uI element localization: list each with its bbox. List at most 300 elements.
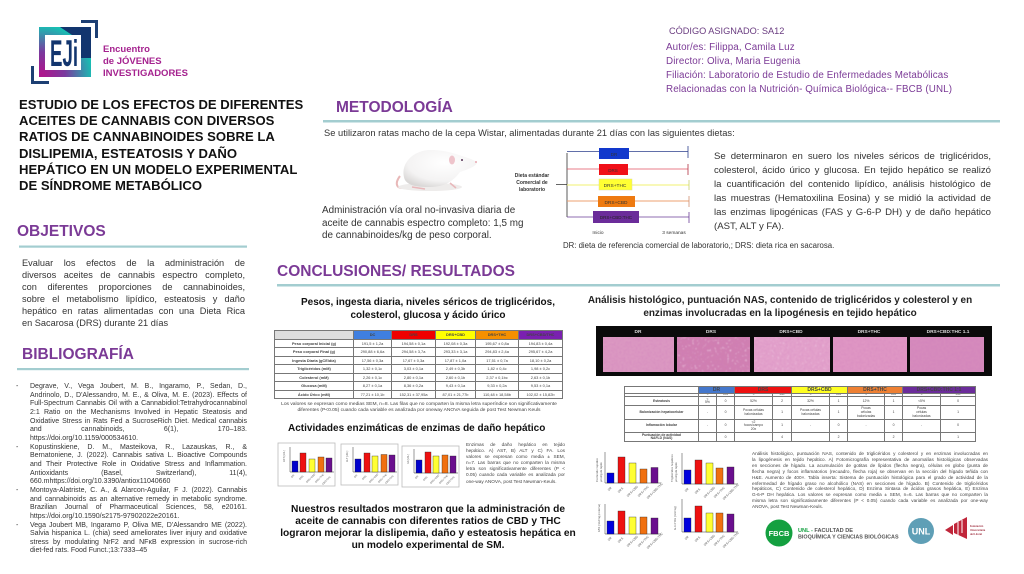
- table: body weight and serum: 110,48 ± 18,58b: [483, 392, 511, 397]
- chart: E G-6-P DH: [673, 499, 740, 549]
- heading: análisis histológico: [588, 295, 972, 319]
- bibliography list: stress by modulating NrF2 and NFκB expression in sucrose-rich: [30, 539, 247, 546]
- chart: ALT: DR: [354, 474, 358, 479]
- bibliography list: and cannabinoids as an alternative remedy in metabolic syndrome.: [30, 496, 247, 503]
- table: NAS score: Balonización hepatocelular: [640, 410, 683, 414]
- chart: E G-6-P DH: DRS+CBD: [703, 533, 716, 547]
- table: body weight and serum: Colesterol (mM): [299, 375, 329, 380]
- table: NAS score: NAFLD (NAS): [651, 436, 672, 440]
- chart: D FAS: [597, 504, 664, 550]
- table: body weight and serum: 2,26 ± 0,1c: [363, 375, 382, 380]
- table: NAS score: DRS+CBD:THC 1:1: [917, 387, 961, 393]
- table: body weight and serum: 152,31 ± 37,95a: [399, 392, 428, 397]
- table: NAS score: 1: [838, 410, 839, 414]
- table: body weight and serum: 294,83 ± 2,4a: [485, 349, 509, 354]
- bibliography list: -: [16, 522, 18, 528]
- chart: FA: DRS+CBD: [430, 474, 440, 485]
- histology caption: enfermedad de hígado graso no alcohólico (NAS) en secciones de hígado. B) Contenido de triglicéridos: [752, 481, 988, 486]
- table: body weight and serum: 2,60 ± 0,1b: [446, 375, 465, 380]
- bibliography list: Full-Spectrum Cannabis Oil with a Cannabidiol:Tetrahydrocannabinol: [30, 400, 247, 407]
- diagram start and end labels: Inicio: [592, 230, 604, 236]
- chart: AST: DRS+THC: [315, 473, 325, 484]
- chart: B triglicéridos hepáticos: [595, 452, 664, 500]
- chart: D FAS: FAS (mU/mg proteína): [597, 504, 601, 532]
- author block: Filiación: Laboratorio de Estudio de Enfermedades Metabólicas: [666, 70, 948, 81]
- assigned code: CÓDIGO ASIGNADO: SA12: [669, 26, 784, 36]
- table: body weight and serum: 102,02 ± 15,82b: [526, 392, 555, 397]
- administration text: de cannabinoides/kg de peso corporal.: [322, 230, 492, 241]
- table: NAS score: DR: [713, 387, 720, 393]
- chart: FA: DR: [415, 475, 419, 480]
- administration text: Administración vía oral no-invasiva diaria de: [322, 205, 515, 216]
- chart: C colesterol hepático: Triglicéridos hepáticos: [670, 454, 674, 482]
- icon: white rat: [397, 150, 477, 191]
- table: NAS score: %: [810, 394, 811, 396]
- objectives text: hepático en ratas alimentadas con una Dieta Rica: [22, 306, 245, 316]
- diagram: diet groups timeline: [515, 146, 689, 236]
- logo text: Encuentro de Jóvenes Investigadores: de JÓVENES: [103, 56, 162, 67]
- bibliography list: -: [16, 444, 18, 450]
- table: body weight and serum: 192,08 ± 0,3a: [444, 341, 467, 346]
- diagram start and end labels: 3 semanas: [662, 230, 686, 236]
- table: NAS score: <2: [752, 420, 755, 424]
- chart: FA: [402, 446, 459, 487]
- section rule: metodologia: [323, 120, 1000, 122]
- objectives text: sobre el metabolismo lipídico, esteatosis y daño: [22, 294, 245, 304]
- histology panel: [596, 326, 992, 376]
- chart: AST: AST (UI/L): [283, 450, 286, 462]
- group DRS+CBD: DRS+CBD: [604, 200, 628, 206]
- table: body weight and serum: 195,67 ± 0,8a: [485, 341, 509, 346]
- histology caption: H&E. Aumento de 400×. Tabla inserta: Sistema de puntuación histológica para el grado de actividad de la: [752, 475, 988, 480]
- logo: FBCB: UNL - FACULTAD DE: [798, 528, 853, 534]
- table: body weight and serum: DRS+THC: [488, 332, 506, 337]
- table: body weight and serum: [274, 330, 563, 399]
- chart: ALT: DRS+THC: [378, 473, 388, 484]
- bibliography list: Oxidative Stress in Rats Fed a SucroseRich Diet. Medical cannabis: [30, 418, 247, 425]
- bibliography list: Salvia hispanica L. (chia) seed ameliorates liver injury and oxidative: [30, 530, 247, 537]
- group DR: [567, 146, 688, 159]
- table: NAS score: DRS+CBD: [807, 387, 832, 393]
- group DRS: [567, 164, 688, 175]
- table: NAS score: 5%: [705, 400, 710, 404]
- histology caption: [752, 451, 988, 509]
- table: NAS score: score: [836, 394, 841, 396]
- chart: FA: FA (UI/L): [407, 454, 410, 464]
- chart: B triglicéridos hepáticos: µmol/g de tejido: [599, 462, 603, 482]
- table: NAS score: -: [865, 423, 867, 427]
- author block: Director: Oliva, Maria Eugenia: [666, 56, 800, 67]
- chart: C colesterol hepático: DR: [684, 486, 690, 493]
- table: NAS score: Esteatosis: [653, 399, 670, 403]
- chart: C colesterol hepático: DRS+THC: [713, 485, 726, 499]
- table: NAS score: 0: [725, 410, 726, 414]
- heading: conclusiones y resultados: CONCLUSIONES/ RESULTADOS: [277, 263, 515, 280]
- table: NAS score: 0: [957, 423, 959, 427]
- logo text: Encuentro de Jóvenes Investigadores: INVESTIGADORES: [103, 68, 188, 79]
- chart: D FAS: DRS+CBD: [626, 534, 639, 548]
- group DR: DR: [611, 152, 618, 157]
- table: body weight and serum: DC: [370, 332, 375, 337]
- chart: C colesterol hepático: [670, 453, 740, 501]
- diagram base diet label: [515, 173, 549, 193]
- micrograph DR: [603, 337, 674, 372]
- logo: Federación Universitaria del Litoral: Federación: [970, 525, 984, 528]
- administration text: aceite de cannabis espectro completo: 1,5 mg: [322, 218, 523, 229]
- logo: FBCB: [766, 520, 899, 546]
- table: NAS score: 32%: [807, 399, 814, 403]
- bibliography list: Brazilian Journal of Pharmaceutical Sciences, 58, e20161.: [30, 504, 247, 511]
- group DRS+CBD:THC: DRS+CBD:THC: [600, 215, 633, 220]
- table: NAS score: 0: [957, 399, 959, 403]
- logo: FBCB: FBCB: [769, 529, 790, 538]
- group DRS+CBD: [567, 196, 689, 207]
- histology panel: DR: [635, 329, 642, 335]
- title: ESTUDIO DE LOS EFECTOS DE DIFERENTES: [19, 97, 303, 112]
- table: body weight and serum: 2,49 ± 0,3b: [446, 366, 465, 371]
- bibliography list: -: [16, 487, 18, 494]
- table: NAS score: Pocas células: [800, 408, 821, 412]
- logo: Federación Universitaria del Litoral: [945, 517, 986, 540]
- serum and liver measurements text: la cuantificación del contenido lipídico, análisis histológico de: [714, 179, 991, 190]
- chart: C colesterol hepático: DRS: [694, 487, 701, 495]
- table: NAS score: 12%: [863, 399, 869, 403]
- table: body weight and serum: 8,27 ± 0,1a: [363, 383, 382, 388]
- logo text: Encuentro de Jóvenes Investigadores: [103, 44, 188, 79]
- table: body weight and serum: 1,82 ± 0,4c: [487, 366, 507, 371]
- table: body weight and serum: 9,33 ± 0,2a: [487, 383, 507, 388]
- enzyme chart caption: hepático. A) AST, B) ALT y C) FA. Los: [466, 448, 565, 453]
- histology caption: misma letra son significativamente diferentes (P < 0.05) cuando cada variable es analizada por one-way: [752, 498, 988, 503]
- table: NAS score: 0: [838, 423, 839, 427]
- table: body weight and serum: 294,58 ± 3,7a: [402, 349, 425, 354]
- conclusion statement: [280, 504, 576, 551]
- enzyme chart caption: valores se expresan como media ± SEM,: [466, 454, 565, 459]
- table: body weight and serum: 9,53 ± 0,1a: [531, 383, 550, 388]
- chart: B triglicéridos hepáticos: DRS+CBD: [626, 484, 639, 498]
- micrograph DRS+THC: [833, 337, 907, 372]
- serum and liver measurements text: colesterol, ácido úrico y glucosa. En tejido hepático se realizó: [714, 165, 991, 176]
- title: HEPÁTICO EN UN MODELO EXPERIMENTAL: [19, 162, 297, 177]
- chart: C colesterol hepático: µmol/g de tejido: [674, 462, 678, 482]
- table: body weight and serum: Ingesta Diaria (gCE/día): [292, 358, 336, 363]
- table footnote: Los valores se expresan como medias SEM, n=8. Las filas que no comparten la misma letra superíndice son significativamente: [281, 402, 557, 407]
- table: body weight and serum: 9,43 ± 0,1a: [446, 383, 465, 388]
- bibliography list: diet-fed rats. Food Funct.;13:7333–45: [30, 547, 147, 554]
- histology panel: DRS+CBD: [779, 329, 803, 335]
- table: NAS score: [624, 386, 976, 442]
- table: body weight and serum: 2,80 ± 0,1a: [404, 375, 423, 380]
- chart: D FAS: DR: [607, 535, 613, 542]
- bibliography list: Andrinolo, D., D'Alessandro, M. E., & Oliva, M. E. (2023). Effects of: [30, 392, 247, 399]
- table footnote: diferentes (P<0.05) cuando cada variable es analizada por oneway ANOVA seguida de post Test Newman Keuls: [297, 408, 540, 413]
- group DRS+THC: DRS+THC: [604, 183, 627, 189]
- title: ACEITES DE CANNABIS CON DIVERSOS: [19, 113, 274, 128]
- bibliography list: https://doi.org/10.1590/s2175-97902022e20161.: [30, 513, 179, 520]
- logo: Federación Universitaria del Litoral: Universitaria: [970, 529, 986, 532]
- bibliography list: Bernatoniene, J. (2022). Cannabis sativa L. Bioactive Compounds: [30, 452, 247, 459]
- chart: E G-6-P DH: DRS+CBD:THC: [722, 530, 740, 549]
- chart: B triglicéridos hepáticos: DRS: [617, 486, 624, 494]
- table: NAS score: 2: [781, 399, 783, 403]
- enzyme chart caption: letra son significativamente diferentes (P <: [466, 466, 565, 471]
- table: body weight and serum: 2,37 ± 0,1bc: [486, 375, 508, 380]
- group DRS: DRS: [608, 168, 618, 173]
- group DRS+THC: [567, 179, 689, 190]
- table: NAS score: 4: [781, 435, 783, 439]
- table: body weight and serum: 194,58 ± 0,1a: [402, 341, 425, 346]
- table: NAS score: DRS+THC: [863, 387, 887, 393]
- chart: AST: [278, 443, 335, 486]
- micrograph DRS+CBD: [754, 337, 830, 372]
- bibliography list: Degrave, V., Vega Joubert, M. B., Ingaramo, P., Sedan, D.,: [30, 383, 247, 390]
- bibliography list: and Their Protective Role in Oxidative Stress and Inflammation.: [30, 461, 247, 468]
- bibliography list: https://doi.org/10.1159/000534610.: [30, 435, 138, 442]
- table: body weight and serum: 194,83 ± 0,4a: [529, 341, 552, 346]
- chart: B triglicéridos hepáticos: DRS+CBD:THC: [646, 481, 664, 500]
- bibliography list: Montoya-Alatriste, C. A., & Alarcon-Aguilar, F J. (2022). Cannabis: [30, 487, 247, 494]
- bibliography list: [16, 382, 247, 554]
- heading: bibliografía: BIBLIOGRAFÍA: [22, 346, 134, 363]
- objectives text: en Sacarosa (DRS) durante 21 días: [22, 318, 168, 328]
- methodology intro: Se utilizaron ratas macho de la cepa Wistar, alimentadas durante 21 días con las siguientes dietas:: [324, 128, 735, 138]
- heading: metodología: METODOLOGÍA: [336, 99, 453, 116]
- bibliography list: -: [16, 383, 18, 390]
- chart: E G-6-P DH: DRS: [694, 535, 701, 543]
- author block: Relacionadas con la Nutrición- Química Biológica-- FBCB (UNL): [666, 84, 952, 95]
- histology caption: G-6-P DH hepática. Los valores se expresan como media ± SEM, n=6. Las barras que no comparten la: [752, 492, 988, 497]
- table: body weight and serum: 293,33 ± 3,1a: [444, 349, 467, 354]
- objectives text: Evaluar los efectos de la administración de: [22, 258, 245, 268]
- table: NAS score: score: [780, 394, 784, 396]
- bibliography list: and cannabinoids, 6(1), 170–183.: [30, 426, 247, 433]
- objectives text: con diferentes proporciones de cannabinoides,: [22, 282, 245, 292]
- enzyme chart caption: Enzimas de daño hepático en tejido: [466, 442, 565, 447]
- table: NAS score: 0: [725, 435, 726, 439]
- table: NAS score: 0: [725, 423, 726, 427]
- author block: Autor/es: Filippa, Camila Luz: [666, 42, 795, 53]
- logo: EJI: [31, 20, 98, 84]
- table: NAS score: balonizadas: [801, 412, 820, 416]
- chart: FA: DRS: [423, 476, 429, 482]
- table: body weight and serum: Glucosa (mM): [301, 383, 327, 388]
- chart: D FAS: DRS+CBD:THC: [646, 531, 664, 550]
- table: body weight and serum: 295,67 ± 4,2a: [529, 349, 552, 354]
- histology panel: DRS+THC: [858, 329, 881, 335]
- administration text: [322, 205, 523, 241]
- enzyme chart caption: one-way ANOVA, post Test Newman-Keuls.: [466, 479, 556, 484]
- chart: C colesterol hepático: DRS+CBD: [703, 485, 716, 499]
- bibliography list: 2:1 Ratio on the Mechanisms Involved in Hepatic Steatosis and: [30, 409, 247, 416]
- heading: objetivos: OBJETIVOS: [17, 223, 106, 240]
- diet note: DR: dieta de referencia comercial de laboratorio,; DRS: dieta rica en sacarosa.: [563, 241, 834, 250]
- heading: pesos table: Pesos, ingesta diaria, niveles séricos de triglicéridos,: [301, 297, 555, 308]
- table: body weight and serum: DRS: [409, 332, 418, 337]
- group DRS+CBD:THC: [567, 211, 689, 223]
- logo text: Encuentro de Jóvenes Investigadores: Encuentro: [103, 44, 150, 55]
- chart: B triglicéridos hepáticos: Contenido hepático: [595, 457, 599, 482]
- title: DE SÍNDROME METABÓLICO: [19, 178, 202, 193]
- table: NAS score: DRS: [758, 387, 768, 393]
- histology caption: la lipogénesis en tejido hepático. A) Fotomicrografía representativa de anomalías histológicas observadas: [752, 457, 988, 462]
- table: body weight and serum: Ácido Úrico (mM): [298, 392, 330, 397]
- table: NAS score: células: [861, 410, 871, 414]
- table: NAS score: células: [916, 410, 927, 414]
- table: NAS score: %: [753, 394, 754, 396]
- heading: análisis histológico: Análisis histológico, puntuación NAS, contenido de triglicéridos y colesterol y en: [588, 295, 972, 306]
- histology caption: en secciones de hígado. La acumulación de gotitas de lípidos (flecha negra), células en globo (punta de: [752, 463, 988, 468]
- table: body weight and serum: 17,87 ± 1,0a: [445, 358, 466, 363]
- table: NAS score: 1: [957, 410, 959, 414]
- chart: E G-6-P DH: DRS+THC: [713, 533, 726, 547]
- chart: B triglicéridos hepáticos: DRS+THC: [637, 484, 650, 498]
- conclusion statement: un modelo experimental de SM.: [352, 540, 504, 551]
- table: body weight and serum: 17,56 ± 0,3a: [362, 358, 383, 363]
- table: NAS score: 1: [838, 399, 839, 403]
- chart: ALT: DRS: [362, 475, 368, 481]
- table: NAS score: 1: [893, 410, 894, 414]
- table: body weight and serum: 3,03 ± 0,1a: [404, 366, 423, 371]
- diagram trunk: [556, 153, 567, 217]
- heading: análisis histológico: enzimas involucradas en la lipogénesis en tejido hepático: [643, 308, 917, 319]
- title: [19, 97, 303, 193]
- table: NAS score: <5%: [918, 399, 925, 403]
- table: body weight and serum: Peso corporal Inicial (g): [292, 341, 336, 346]
- logo: UNL: UNL: [912, 526, 931, 536]
- table: NAS score: score: [956, 394, 960, 396]
- table: NAS score: focos/campo: [744, 423, 763, 427]
- heading: pesos table: [301, 297, 555, 321]
- table: NAS score: %: [707, 394, 708, 396]
- table: NAS score: 20x: [751, 427, 756, 431]
- enzyme chart caption: n=7. Las barras que no comparten la misma: [466, 460, 565, 465]
- table: body weight and serum: Triglicéridos (mM): [297, 366, 331, 371]
- title: RATIOS DE CANNABINOIDES SOBRE LA: [19, 129, 275, 144]
- table: NAS score: 52%: [750, 399, 757, 403]
- micrograph DRS: [677, 337, 750, 372]
- chart: E G-6-P DH: DR: [684, 534, 690, 541]
- objectives text: [22, 258, 245, 328]
- chart: AST: CBD:THC: [322, 476, 332, 486]
- chart: C colesterol hepático: DRS+CBD:THC: [722, 482, 740, 501]
- table: body weight and serum: 87,01 ± 21,77b: [443, 392, 468, 397]
- diagram start and end labels: [592, 230, 686, 236]
- table: body weight and serum: 1,32 ± 0,1c: [363, 366, 382, 371]
- table: body weight and serum: DRS+CBD/THC: [526, 332, 554, 337]
- logo: Federación Universitaria del Litoral: del Litoral: [970, 533, 982, 536]
- table: body weight and serum: 18,10 ± 0,2a: [530, 358, 551, 363]
- enzyme chart caption: [466, 442, 565, 484]
- table: NAS score: 2: [838, 435, 839, 439]
- diagram base diet label: laboratorio: [519, 187, 545, 193]
- chart: D FAS: DRS: [617, 536, 624, 544]
- serum and liver measurements text: [714, 151, 991, 232]
- table: NAS score: balonizadas: [857, 414, 875, 418]
- table: NAS score: -: [707, 410, 708, 414]
- table: NAS score: -: [921, 423, 922, 427]
- conclusion statement: aceite de cannabis con diferentes ratios de CBD y THC: [295, 516, 561, 527]
- table: NAS score: -: [707, 423, 708, 427]
- table: NAS score: %: [921, 394, 922, 396]
- logo: UNL: [908, 518, 934, 544]
- chart: AST: DRS+CBD: [306, 473, 316, 484]
- table: NAS score: Pocas: [861, 406, 871, 410]
- chart: FA: DRS+THC: [439, 474, 449, 485]
- table: NAS score: 1: [893, 399, 894, 403]
- chart: D FAS: DRS+THC: [637, 534, 650, 548]
- table: body weight and serum: 8,36 ± 0,2a: [404, 383, 423, 388]
- table: NAS score: score: [891, 394, 896, 396]
- bibliography list: Antioxidants (Basel, Switzerland), 11(4),: [30, 470, 247, 477]
- table: NAS score: Pocas células: [743, 408, 764, 412]
- heading: pesos table: colesterol, glucosa y ácido úrico: [350, 310, 506, 321]
- chart: E G-6-P DH: G-6-P DH (mU/mg): [673, 506, 677, 530]
- diagram base diet label: Comercial de: [516, 180, 548, 186]
- histology caption: Análisis histológico, puntuación NAS, contenido de triglicéridos y colesterol y en enzimas involucradas en: [752, 451, 988, 456]
- chart: AST: DR: [291, 474, 295, 479]
- table: NAS score: score: [723, 394, 728, 396]
- table: NAS score: 0: [893, 423, 894, 427]
- histology panel: DRS+CBD:THC 1.1: [927, 329, 970, 335]
- histology panel: DRS: [706, 329, 717, 335]
- table: body weight and serum: 290,88 ± 6,6a: [361, 349, 384, 354]
- table: body weight and serum: 191,5 ± 1,2a: [362, 341, 383, 346]
- table: body weight and serum: 2,63 ± 0,1b: [531, 375, 550, 380]
- enzyme chart caption: 0.05) cuando cada variable es analizada por: [466, 472, 565, 477]
- table: body weight and serum: 17,67 ± 0,3a: [403, 358, 424, 363]
- table: body weight and serum: Peso corporal Final (g): [293, 349, 335, 354]
- table: NAS score: 1: [957, 435, 959, 439]
- serum and liver measurements text: Se determinaron en suero los niveles séricos de triglicéridos,: [714, 151, 991, 162]
- table: NAS score: 2: [893, 435, 894, 439]
- chart: AST: DRS: [299, 475, 305, 481]
- table: body weight and serum: DRS+CBD: [446, 332, 465, 337]
- serum and liver measurements text: las muestras (Hematoxilina Eosina) y se midió la actividad de: [714, 193, 991, 204]
- histology caption: hepáticos, C) Contenido de colesterol hepático, D) Enzima Sintasa de ácidos grasos hepática, E) Enzima: [752, 486, 988, 491]
- bibliography list: Vega Joubert MB, Ingaramo P, Oliva ME, D'Alessandro ME (2022).: [30, 522, 247, 528]
- table: body weight and serum: 77,21 ± 10,1b: [361, 392, 384, 397]
- table footnote: [281, 402, 557, 413]
- table: NAS score: Pocas: [917, 406, 926, 410]
- table: body weight and serum: 17,51 ± 0,7a: [486, 358, 508, 363]
- serum and liver measurements text: las enzimas lipogénicas (FAS y G-6-P DH) y de daño hepático: [714, 207, 991, 218]
- micrograph DRS+CBD:THC: [910, 337, 984, 372]
- bibliography list: 660.mhttps://doi.org/10.3390/antiox11040660: [30, 478, 170, 485]
- chart: ALT: DRS+CBD: [369, 473, 379, 484]
- serum and liver measurements text: (AST, ALT y FA).: [714, 221, 784, 232]
- objectives text: diversos aceites de cannabis espectro completo,: [22, 270, 245, 280]
- section rule: objetivos: [19, 246, 247, 248]
- bibliography list: Kopustinskiene, D. M., Masteikova, R., Lazauskas, R., &: [30, 444, 247, 451]
- chart: ALT: [341, 444, 398, 485]
- section rule: bibliografia: [17, 368, 249, 370]
- logo: EJI: EJi: [50, 33, 78, 74]
- table: NAS score: 1: [781, 410, 783, 414]
- chart: FA: CBD:THC: [446, 476, 456, 486]
- histology caption: flecha negra) y focos inflamatorios (recuadro, flecha roja) se observan en la sección del hígado teñida con: [752, 469, 988, 474]
- table: body weight and serum: 1,98 ± 0,2c: [531, 366, 550, 371]
- table: NAS score: %: [865, 394, 867, 396]
- table: NAS score: balonizadas: [912, 414, 931, 418]
- logo: FBCB: BIOQUÍMICA Y CIENCIAS BIOLÓGICAS: [798, 532, 899, 540]
- conclusion statement: Nuestros resultados mostraron que la administración de: [291, 504, 565, 515]
- author block: [666, 42, 952, 95]
- chart: B triglicéridos hepáticos: DR: [607, 485, 613, 492]
- table: NAS score: 1: [781, 423, 783, 427]
- diagram base diet label: Dieta estándar: [515, 173, 549, 179]
- chart: ALT: ALT (UI/L): [346, 451, 349, 462]
- histology caption: ANOVA, post Test Newman-Keuls.: [752, 504, 823, 509]
